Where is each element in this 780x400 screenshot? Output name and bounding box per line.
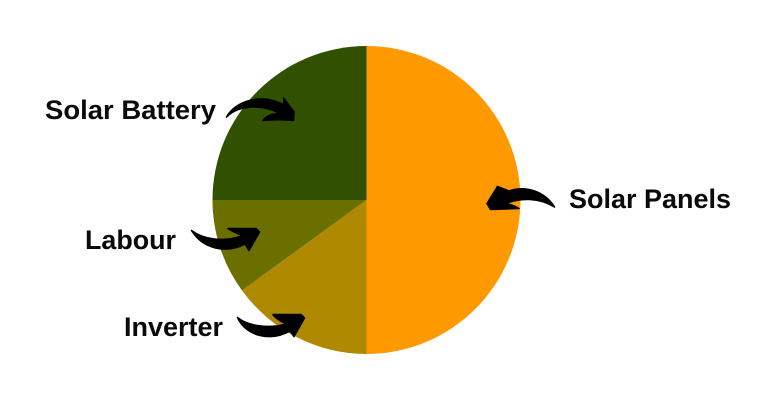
label: Solar Panels: Solar Panels (569, 184, 731, 214)
arrow: Inverter (238, 314, 304, 337)
slice: Solar Panels (366, 46, 520, 354)
arrow: Solar Panels (487, 186, 554, 210)
pie chart (212, 46, 520, 354)
label: Inverter: Inverter (124, 312, 223, 342)
arrow: Labour (192, 228, 260, 250)
slice: Solar Battery (212, 46, 366, 200)
slice: Inverter (242, 200, 366, 354)
arrow: Solar Battery (226, 98, 294, 120)
slice: Labour (212, 200, 366, 290)
label: Labour: Labour (85, 225, 176, 255)
label: Solar Battery: Solar Battery (45, 95, 216, 125)
